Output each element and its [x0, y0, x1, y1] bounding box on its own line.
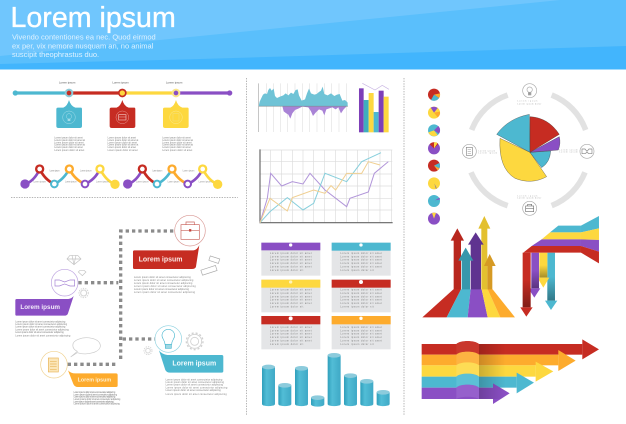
card: orange: Lorem ipsum dolor sit amet: [340, 326, 382, 329]
icon: briefcase circle: [523, 201, 537, 215]
icon: gear small: [79, 288, 88, 298]
card: orange: Lorem ipsum dolor sit amet: [340, 339, 382, 342]
arrow: purple: [468, 232, 484, 290]
icon: gear small 2: [144, 347, 152, 355]
arrow: teal: [422, 373, 534, 393]
text block: red: Lorem ipsum dolor sit amet consectetur adipiscing: [134, 285, 196, 288]
card: yellow: Lorem ipsum dolor sit: [270, 306, 304, 309]
card: purple: [261, 243, 320, 276]
main pie: [497, 114, 560, 181]
timeline text blocks: Lorem ipsum dolor sit amet at: [108, 139, 139, 142]
text block: orange: [74, 391, 121, 405]
pie labels: Lorem ipsum: [559, 149, 578, 152]
wave chain left: [20, 164, 120, 189]
arrow: red: [520, 253, 533, 317]
header banner: [0, 0, 626, 70]
card: red 2: Lorem ipsum dolor sit amet: [270, 329, 312, 332]
text block: teal: Lorem ipsum dolor sit amet consectetur adipiscing: [166, 386, 228, 389]
arrow: purple: [528, 253, 540, 298]
pie labels: Lorem ipsum: [478, 151, 497, 154]
card: red 2: Lorem ipsum dolor sit amet: [270, 336, 312, 339]
text block: teal: [166, 378, 228, 396]
banner: orange: Lorem ipsum: [78, 378, 111, 384]
wave chain right: Lorem ipsum: [183, 170, 194, 173]
card: teal: Lorem ipsum dolor sit amet: [340, 265, 382, 268]
timeline text blocks: Lorem ipsum dolor sit amet: [54, 149, 85, 152]
banner: purple: Lorem ipsum: [20, 304, 60, 311]
line chart: [260, 149, 393, 223]
card: purple: Lorem ipsum dolor sit amet: [270, 255, 312, 258]
wave chain right: Lorem ipsum: [152, 169, 162, 172]
timeline text blocks: Lorem ipsum dolor sit amet: [54, 137, 83, 140]
band shading: [479, 344, 506, 399]
subtitle text: suscipit theophrastus duo.: [12, 50, 99, 59]
card: yellow: Lorem ipsum dolor sit amet: [270, 299, 312, 302]
timeline labels: Lorem ipsum: [166, 80, 183, 84]
timeline text blocks: Lorem ipsum dolor sit amet at: [162, 144, 193, 147]
panel: info cards: [261, 243, 391, 407]
card: purple: Lorem ipsum dolor sit amet: [270, 252, 312, 255]
banner: red: Lorem ipsum: [139, 256, 183, 263]
pie labels: Lorem ipsum: [559, 151, 578, 154]
subtitle text: Vivendo contentiones ea nec. Quod eirmod: [12, 32, 156, 42]
ring arcs: [471, 95, 586, 206]
timeline text blocks: Lorem ipsum dolor sit amet: [162, 146, 191, 149]
text block: orange: Lorem ipsum dolor sit amet consectetur adipiscing: [74, 400, 114, 403]
card: yellow: Lorem ipsum dolor sit amet: [270, 292, 312, 295]
timeline nodes: [13, 89, 232, 97]
text block: orange: Lorem ipsum dolor sit amet consectetur adipiscing: [74, 402, 120, 405]
card: orange: [332, 316, 391, 349]
timeline text blocks: Lorem ipsum dolor sit amet: [54, 141, 84, 144]
text block: red: Lorem ipsum dolor sit amet consectetur adipiscing: [134, 276, 191, 279]
panel: flow diagram: [15, 215, 228, 405]
card: teal: Lorem ipsum dolor sit: [340, 269, 374, 272]
timeline line: [15, 88, 230, 98]
timeline text blocks: Lorem ipsum dolor sit amet: [162, 149, 193, 152]
text block: purple: Lorem ipsum dolor sit amet consectetur adipiscing: [15, 334, 71, 337]
tag: idea: [56, 100, 82, 128]
icon: document: [41, 351, 67, 378]
card: teal: Lorem ipsum dolor sit amet: [340, 259, 382, 262]
text block: red: Lorem ipsum dolor sit amet consectetur adipiscing: [134, 279, 194, 282]
card: orange: Lorem ipsum dolor sit: [340, 343, 374, 346]
timeline labels: Lorem ipsum: [59, 80, 76, 84]
icon: briefcase: [175, 215, 205, 246]
card: red: Lorem ipsum dolor sit amet: [340, 289, 382, 292]
timeline text blocks: Lorem ipsum dolor sit amet: [54, 146, 83, 149]
tag: briefcase: [110, 100, 135, 128]
card: red: Lorem ipsum dolor sit amet: [340, 299, 382, 302]
card: teal: [332, 243, 391, 276]
wave chain right: Lorem ipsum: [168, 181, 179, 184]
bar chart: [359, 83, 389, 132]
text block: teal: Lorem ipsum dolor sit amet consectetur adipiscing: [166, 389, 221, 392]
timeline text blocks: Lorem ipsum dolor sit amet at: [108, 144, 139, 147]
wave chain left: Lorem ipsum: [33, 181, 46, 184]
card: teal: Lorem ipsum dolor sit amet: [340, 255, 382, 258]
arrow: red: [422, 339, 599, 359]
card: red: Lorem ipsum dolor sit: [340, 306, 374, 309]
timeline text blocks: [54, 137, 193, 152]
wave chain left: Lorem ipsum: [65, 181, 77, 184]
pie labels: Lorem ipsum: [478, 149, 495, 152]
panel: up arrows: [422, 216, 515, 317]
text block: orange: Lorem ipsum dolor sit amet consectetur adipiscing: [74, 398, 121, 401]
timeline text blocks: Lorem ipsum dolor sit amet at: [162, 139, 193, 142]
arrow: yellow: [422, 362, 553, 382]
panel: middle charts: [259, 83, 393, 223]
card: teal: Lorem ipsum dolor sit amet: [340, 252, 382, 255]
card: red: [332, 280, 391, 312]
timeline text blocks: Lorem ipsum dolor sit amet at: [54, 139, 85, 142]
timeline text blocks: Lorem ipsum dolor sit amet: [108, 146, 136, 149]
panel: down arrows: [520, 216, 599, 317]
pie labels: Lorem ipsum: [517, 194, 538, 197]
text block: teal: Lorem ipsum dolor sit amet consectetur adipiscing: [166, 378, 223, 381]
pie labels: Lorem ipsum dolor: [517, 197, 542, 200]
wave chain right: [123, 164, 222, 189]
text block: teal: Lorem ipsum dolor sit amet consectetur adipiscing: [166, 393, 227, 396]
banner: purple: [15, 296, 74, 316]
arrow: orange: [484, 254, 496, 290]
timeline labels: [59, 80, 183, 84]
mini pies: [428, 89, 440, 225]
card: red 2: Lorem ipsum dolor sit amet: [270, 339, 312, 342]
card: orange: Lorem ipsum dolor sit amet: [340, 329, 382, 332]
banner: teal: Lorem ipsum: [172, 361, 216, 368]
perspective base: [422, 289, 515, 317]
icon: diamonds: [67, 255, 86, 276]
text block: teal: Lorem ipsum dolor sit amet consectetur adipiscing: [166, 381, 225, 384]
timeline text blocks: Lorem ipsum dolor sit amet at: [54, 144, 85, 147]
card: purple: Lorem ipsum dolor sit: [270, 269, 304, 272]
folded bands: [523, 216, 599, 263]
card: red 2: Lorem ipsum dolor sit amet: [270, 326, 312, 329]
wave chain left: Lorem ipsum: [96, 181, 109, 184]
area chart: [259, 83, 348, 132]
arrow: teal: [458, 248, 473, 290]
timeline text blocks: Lorem ipsum dolor sit amet: [108, 137, 136, 140]
wave chain left: Lorem ipsum: [80, 170, 92, 173]
dotted connectors: [68, 231, 173, 364]
icon: document circle: [462, 144, 476, 158]
text block: purple: Lorem ipsum dolor sit amet consectetur adipiscing: [15, 323, 68, 326]
panel: right arrows: [422, 339, 599, 404]
panel: pie chart: [428, 84, 594, 225]
icon: gear large: [186, 333, 203, 350]
subtitle text: ex per, vix nemore nusquam an, no animal: [12, 41, 154, 50]
card: red: Lorem ipsum dolor sit amet: [340, 292, 382, 295]
pie labels: Lorem ipsum dolor: [517, 102, 542, 105]
card: red: Lorem ipsum dolor sit amet: [340, 302, 382, 305]
text block: teal: Lorem ipsum dolor sit amet consectetur adipiscing: [166, 384, 224, 387]
timeline text blocks: Lorem ipsum dolor sit amet: [108, 149, 138, 152]
timeline text blocks: Lorem ipsum dolor sit amet: [108, 141, 137, 144]
tag: document: [163, 100, 189, 128]
pie labels: Lorem ipsum: [517, 100, 538, 103]
icon: speech bubble: [71, 338, 100, 357]
card: red 2: Lorem ipsum dolor sit: [270, 343, 304, 346]
card: red 2: Lorem ipsum dolor sit amet: [270, 333, 312, 336]
timeline text blocks: Lorem ipsum dolor sit amet: [162, 137, 191, 140]
arrow: yellow: [478, 216, 490, 290]
icon: bulb: [155, 326, 182, 352]
card: yellow: Lorem ipsum dolor sit amet: [270, 302, 312, 305]
icon: bulb circle: [523, 84, 537, 98]
text block: purple: Lorem ipsum dolor sit amet consectetur adipiscing: [15, 328, 69, 331]
card: red 2: [261, 316, 320, 349]
arrow: teal: [545, 253, 557, 310]
wave chain left: Lorem ipsum: [50, 169, 60, 172]
panel: timeline: [13, 80, 232, 152]
card: purple: Lorem ipsum dolor sit amet: [270, 259, 312, 262]
card: red: Lorem ipsum dolor sit amet: [340, 295, 382, 298]
wave chain right: Lorem ipsum: [199, 181, 211, 184]
timeline text blocks: Lorem ipsum dolor sit amet: [162, 141, 192, 144]
wave chain right: Lorem ipsum: [136, 181, 149, 184]
card: yellow: Lorem ipsum dolor sit amet: [270, 295, 312, 298]
text block: red: Lorem ipsum dolor sit amet consectetur adipiscing: [134, 288, 190, 291]
card: yellow: [261, 280, 320, 312]
card: orange: Lorem ipsum dolor sit amet: [340, 336, 382, 339]
text block: red: [134, 276, 196, 294]
text block: purple: [15, 320, 71, 337]
card: purple: Lorem ipsum dolor sit amet: [270, 265, 312, 268]
text block: red: Lorem ipsum dolor sit amet consectetur adipiscing: [134, 282, 193, 285]
text block: orange: Lorem ipsum dolor sit amet consectetur adipiscing: [74, 393, 118, 396]
arrow: yellow: [537, 253, 549, 288]
banner: teal: [159, 350, 223, 373]
text block: purple: Lorem ipsum dolor sit amet consectetur adipiscing: [15, 326, 66, 329]
banner: red: [133, 245, 199, 269]
icon: handshake circle: [580, 144, 594, 158]
text block: purple: Lorem ipsum dolor sit amet consectetur adipiscing: [15, 331, 64, 334]
icon: handshake: [51, 269, 78, 296]
banner: orange: [68, 370, 118, 387]
title: Lorem ipsum: [10, 2, 176, 34]
card: yellow: Lorem ipsum dolor sit amet: [270, 289, 312, 292]
card: purple: Lorem ipsum dolor sit amet: [270, 262, 312, 265]
wave fold: [456, 341, 479, 399]
text block: purple: Lorem ipsum dolor sit amet consectetur adipiscing: [15, 320, 66, 323]
text block: orange: Lorem ipsum dolor sit amet consectetur adipiscing: [74, 396, 116, 399]
arrow: purple: [422, 383, 510, 404]
cylinder chart: [262, 353, 390, 407]
timeline labels: Lorem ipsum: [112, 80, 129, 84]
card: orange: Lorem ipsum dolor sit amet: [340, 333, 382, 336]
arrow: orange: [422, 350, 576, 371]
arrow: red: [451, 228, 464, 290]
icon: banknotes: [201, 256, 220, 275]
text block: orange: Lorem ipsum dolor sit amet consectetur adipiscing: [74, 391, 116, 394]
pie labels: [478, 100, 578, 200]
text block: red: Lorem ipsum dolor sit amet consectetur adipiscing: [134, 291, 196, 294]
card: teal: Lorem ipsum dolor sit amet: [340, 262, 382, 265]
